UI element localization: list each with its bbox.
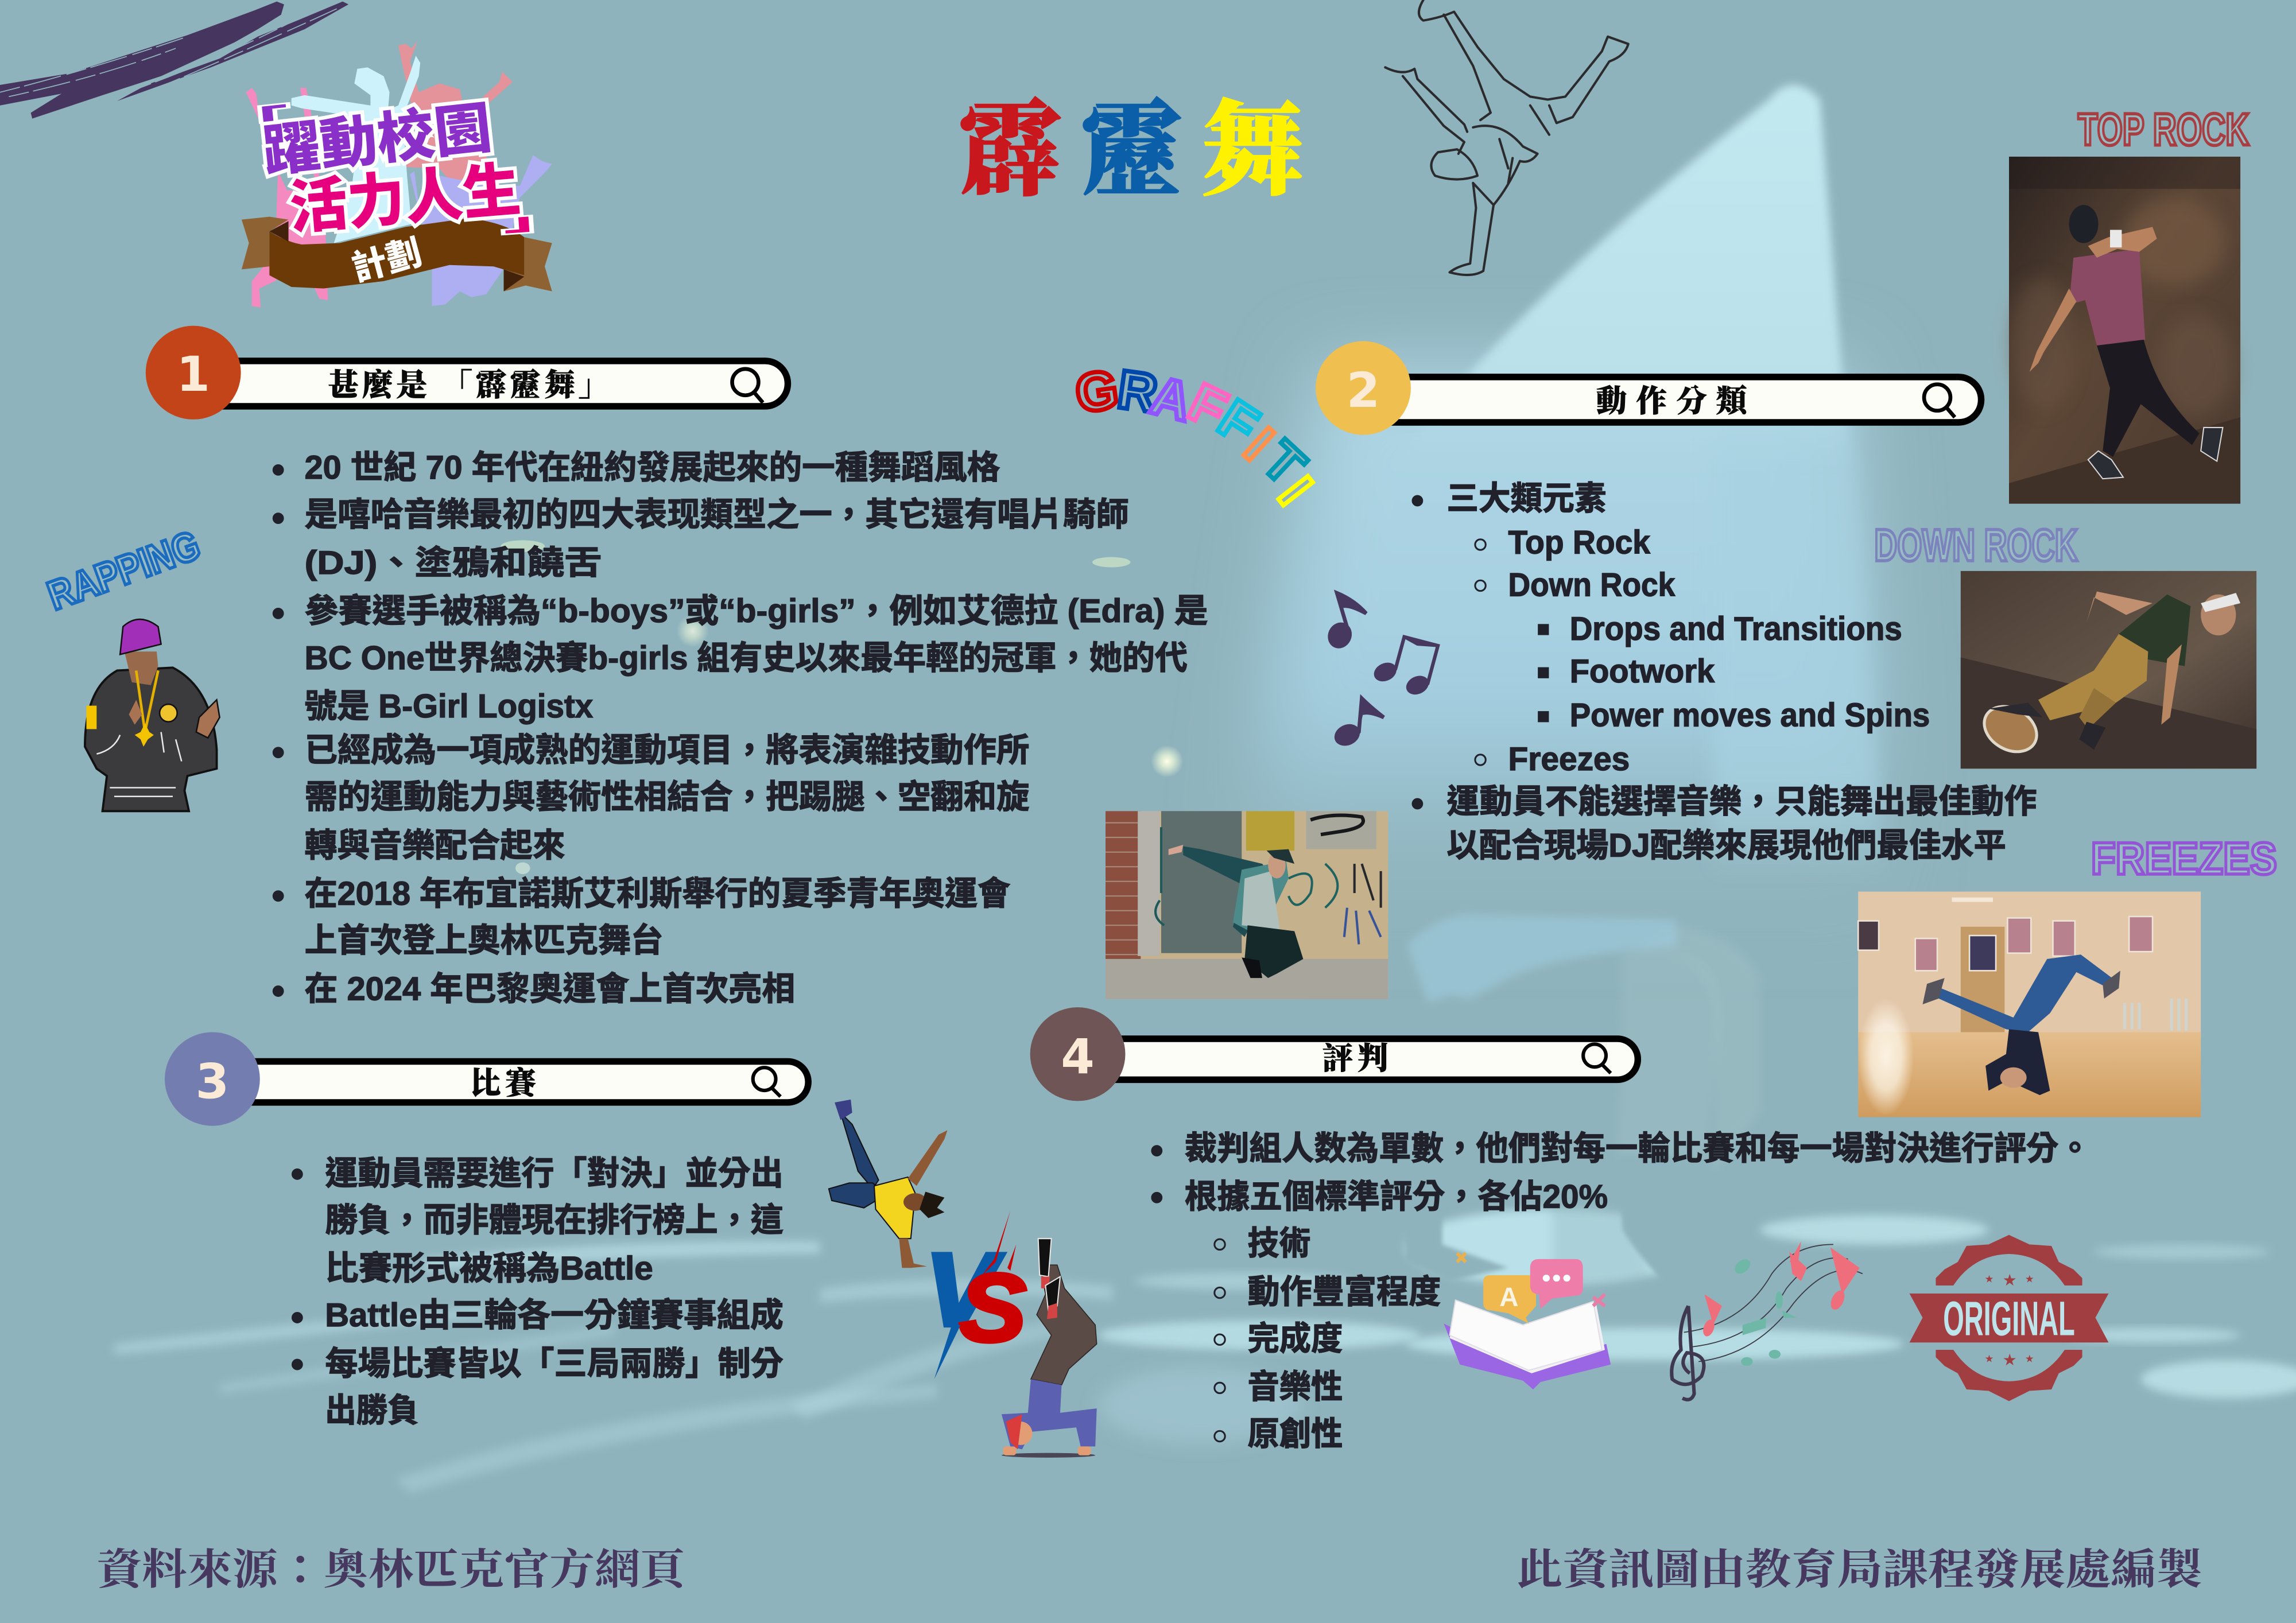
icon: magnifier [1583, 1044, 1611, 1073]
section 4 text: 原創性 [1247, 1416, 1343, 1453]
section 4 text: 動作豐富程度 [1247, 1273, 1441, 1310]
section 1 text: BC One世界總決賽b-girls 組有史以來最年輕的冠軍，她的代 [305, 640, 1188, 677]
section 2 heading [1316, 341, 1981, 435]
section 3 heading [165, 1032, 808, 1126]
brush stroke decoration [0, 2, 348, 119]
section 2 text: 三大類元素 [1446, 480, 1606, 517]
heading text: 評判 [1322, 1034, 1388, 1078]
icon: ORIGINAL seal: ORIGINAL [1943, 1292, 2075, 1346]
section 4 text: 根據五個標準評分，各佔20% [1185, 1179, 1608, 1216]
icon: outline breakdancer [1385, 0, 1628, 275]
photo: down rock [1961, 571, 2256, 768]
photo: freezes [1858, 892, 2201, 1117]
section 3 text: 每場比賽皆以「三局兩勝」制分 [325, 1345, 784, 1382]
badge number: 4 [1061, 1028, 1095, 1085]
section 3 text: Battle由三輪各一分鐘賽事組成 [325, 1297, 784, 1334]
icon: rapper [85, 619, 220, 811]
logo: text line one: 躍動校園 [259, 96, 495, 183]
icon: handstand dancer yellow shirt [829, 1100, 948, 1268]
icon: ORIGINAL seal [1910, 1235, 2108, 1401]
search bar [197, 361, 788, 406]
background: floor light streaks [114, 540, 2296, 1493]
icon: book with speech bubbles [1444, 1253, 1611, 1389]
section 3 text [292, 1155, 784, 1429]
section 1 text: 轉與音樂配合起來 [305, 827, 565, 864]
footer: credit: 此資訊圖由教育局課程發展處編製 [1517, 1536, 2202, 1597]
section 3 text: 勝負，而非體現在排行榜上，這 [325, 1202, 784, 1238]
label: GRAFFITI: A [1145, 365, 1197, 433]
heading text: 甚麼是 「霹靂舞」 [328, 360, 609, 405]
icon: magnifier [1924, 385, 1955, 417]
label: RAPPING: RAPPING [41, 522, 206, 619]
section 4 text: 裁判組人数為單數，他們對每一輪比賽和每一場對決進行評分。 [1185, 1130, 2091, 1167]
freezes posters [1858, 917, 2152, 970]
section 3 text: 出勝負 [325, 1392, 419, 1429]
section 2 text [1412, 480, 2037, 864]
title: 霹靂舞: 舞 [1201, 68, 1303, 216]
section 1 text: 上首次登上奧林匹克舞台 [305, 922, 664, 959]
photo: graffiti wall dancer [1106, 811, 1388, 999]
label: GRAFFITI: F [1180, 372, 1236, 441]
search bar [1091, 1039, 1638, 1080]
title: 霹靂舞 [959, 68, 1303, 216]
section 1 text: 已經成為一項成熟的運動項目，將表演雜技動作所 [305, 732, 1029, 769]
heading text: 動作分類 [1596, 376, 1749, 421]
section 1 text: 在 2024 年巴黎奧運會上首次亮相 [305, 970, 795, 1007]
label: GRAFFITI: G [1072, 359, 1122, 425]
section 2 text: Power moves and Spins [1570, 697, 1930, 733]
section 2 text: 以配合現場DJ配樂來展現他們最佳水平 [1446, 827, 2006, 864]
section 1 text: 是嘻哈音樂最初的四大表现類型之一，其它還有唱片騎師 [305, 496, 1129, 533]
badge 4 [1030, 1007, 1125, 1101]
section 3 text: 比賽形式被稱為Battle [325, 1251, 653, 1287]
section 1 text: 參賽選手被稱為“b-boys”或“b-girls”，例如艾德拉 (Edra) 是 [305, 593, 1208, 630]
label: GRAFFITI: I [1233, 417, 1285, 472]
label: GRAFFITI: R [1114, 359, 1161, 425]
logo: 計劃: 計劃 [348, 232, 426, 288]
section 3 text: 運動員需要進行「對決」並分出 [325, 1155, 784, 1192]
background: spotlight beam [1230, 85, 1889, 937]
title: 霹靂舞: 靂 [1081, 68, 1183, 216]
section 1 text: 20 世紀 70 年代在紐約發展起來的一種舞蹈風格 [305, 449, 1000, 486]
icon: music notes [1324, 593, 1438, 750]
logo: ribbon [242, 217, 552, 292]
freezes dancer [1922, 954, 2120, 1095]
section 4 text [1151, 1130, 2091, 1453]
section 2 text: Freezes [1508, 741, 1630, 778]
search bar [220, 1062, 808, 1102]
lightning strokes [981, 1211, 1016, 1277]
logo: closing bracket: 」 [502, 205, 574, 236]
letter V: V [925, 1232, 1003, 1347]
logo: text line two: 活力人生 [287, 157, 523, 241]
graffiti dancer [1169, 845, 1303, 978]
graffiti scribbles [1155, 816, 1381, 944]
icon: ORIGINAL seal: ★ [2025, 1353, 2034, 1365]
logo: 躍動校園活力人生計劃 [218, 41, 574, 308]
logo: jumping silhouettes [246, 41, 552, 308]
section 1 heading [146, 326, 788, 420]
section 1 text: (DJ)、塗鴉和饒舌 [305, 545, 602, 581]
section 2 text: Drops and Transitions [1570, 611, 1902, 647]
section 1 text: 在2018 年布宜諾斯艾利斯舉行的夏季青年奧運會 [305, 876, 1010, 913]
label: GRAFFITI: F [1208, 388, 1269, 457]
search bar [1369, 377, 1981, 422]
badge 2 [1316, 341, 1411, 435]
section 2 text: 運動員不能選擇音樂，只能舞出最佳動作 [1446, 783, 2037, 820]
label: FREEZES: FREEZES [2091, 833, 2277, 884]
label: GRAFFITI: T [1251, 430, 1316, 496]
section 2 text: Top Rock [1508, 524, 1650, 561]
badge 3 [165, 1032, 260, 1126]
icon: ORIGINAL seal: ★ [1985, 1273, 1994, 1286]
icon: VS lightning [925, 1211, 1026, 1379]
label: DOWN ROCK: DOWN ROCK [1874, 519, 2078, 570]
icon: ORIGINAL seal: ★ [2003, 1271, 2017, 1290]
badge number: 2 [1347, 362, 1380, 418]
icon: treble clef with notes [1671, 1241, 1863, 1400]
icon: ORIGINAL seal: ★ [2025, 1273, 2034, 1286]
icon: magnifier [753, 1067, 781, 1097]
photo: top rock [2009, 157, 2240, 504]
icon: ORIGINAL seal: ★ [1985, 1353, 1994, 1365]
section 2 text: Footwork [1570, 653, 1715, 690]
section 4 text: 完成度 [1247, 1321, 1343, 1357]
section 1 text: 需的運動能力與藝術性相結合，把踢腿、空翻和旋 [305, 779, 1029, 816]
label: GRAFFITI: I [1267, 467, 1324, 515]
icon: magnifier [732, 369, 763, 403]
section 2 text: Down Rock [1508, 566, 1675, 603]
letter S: S [959, 1254, 1026, 1362]
badge number: 3 [196, 1053, 229, 1109]
section 1 text: 號是 B-Girl Logistx [305, 688, 593, 725]
down rock dancer [1976, 592, 2240, 761]
icon: headstand dancer [1002, 1238, 1097, 1458]
footer: source: 資料來源：奧林匹克官方網頁 [96, 1536, 691, 1597]
section 4 heading [1030, 1007, 1638, 1101]
section 4 text: 技術 [1247, 1225, 1310, 1262]
top rock dancer [2030, 205, 2223, 479]
section 4 text: 音樂性 [1247, 1369, 1343, 1405]
heading text: 比賽 [470, 1059, 538, 1103]
label: GRAFFITI [1072, 359, 1324, 515]
logo: opening bracket: 「 [218, 103, 290, 137]
section 1 text [273, 449, 1208, 1007]
title: 霹靂舞: 霹 [959, 68, 1061, 216]
badge 1 [146, 326, 241, 420]
icon: book with speech bubbles: A [1499, 1282, 1518, 1312]
icon: ORIGINAL seal: ★ [2003, 1350, 2017, 1369]
badge number: 1 [176, 346, 210, 402]
background: ghost dancer [1398, 915, 1794, 1296]
